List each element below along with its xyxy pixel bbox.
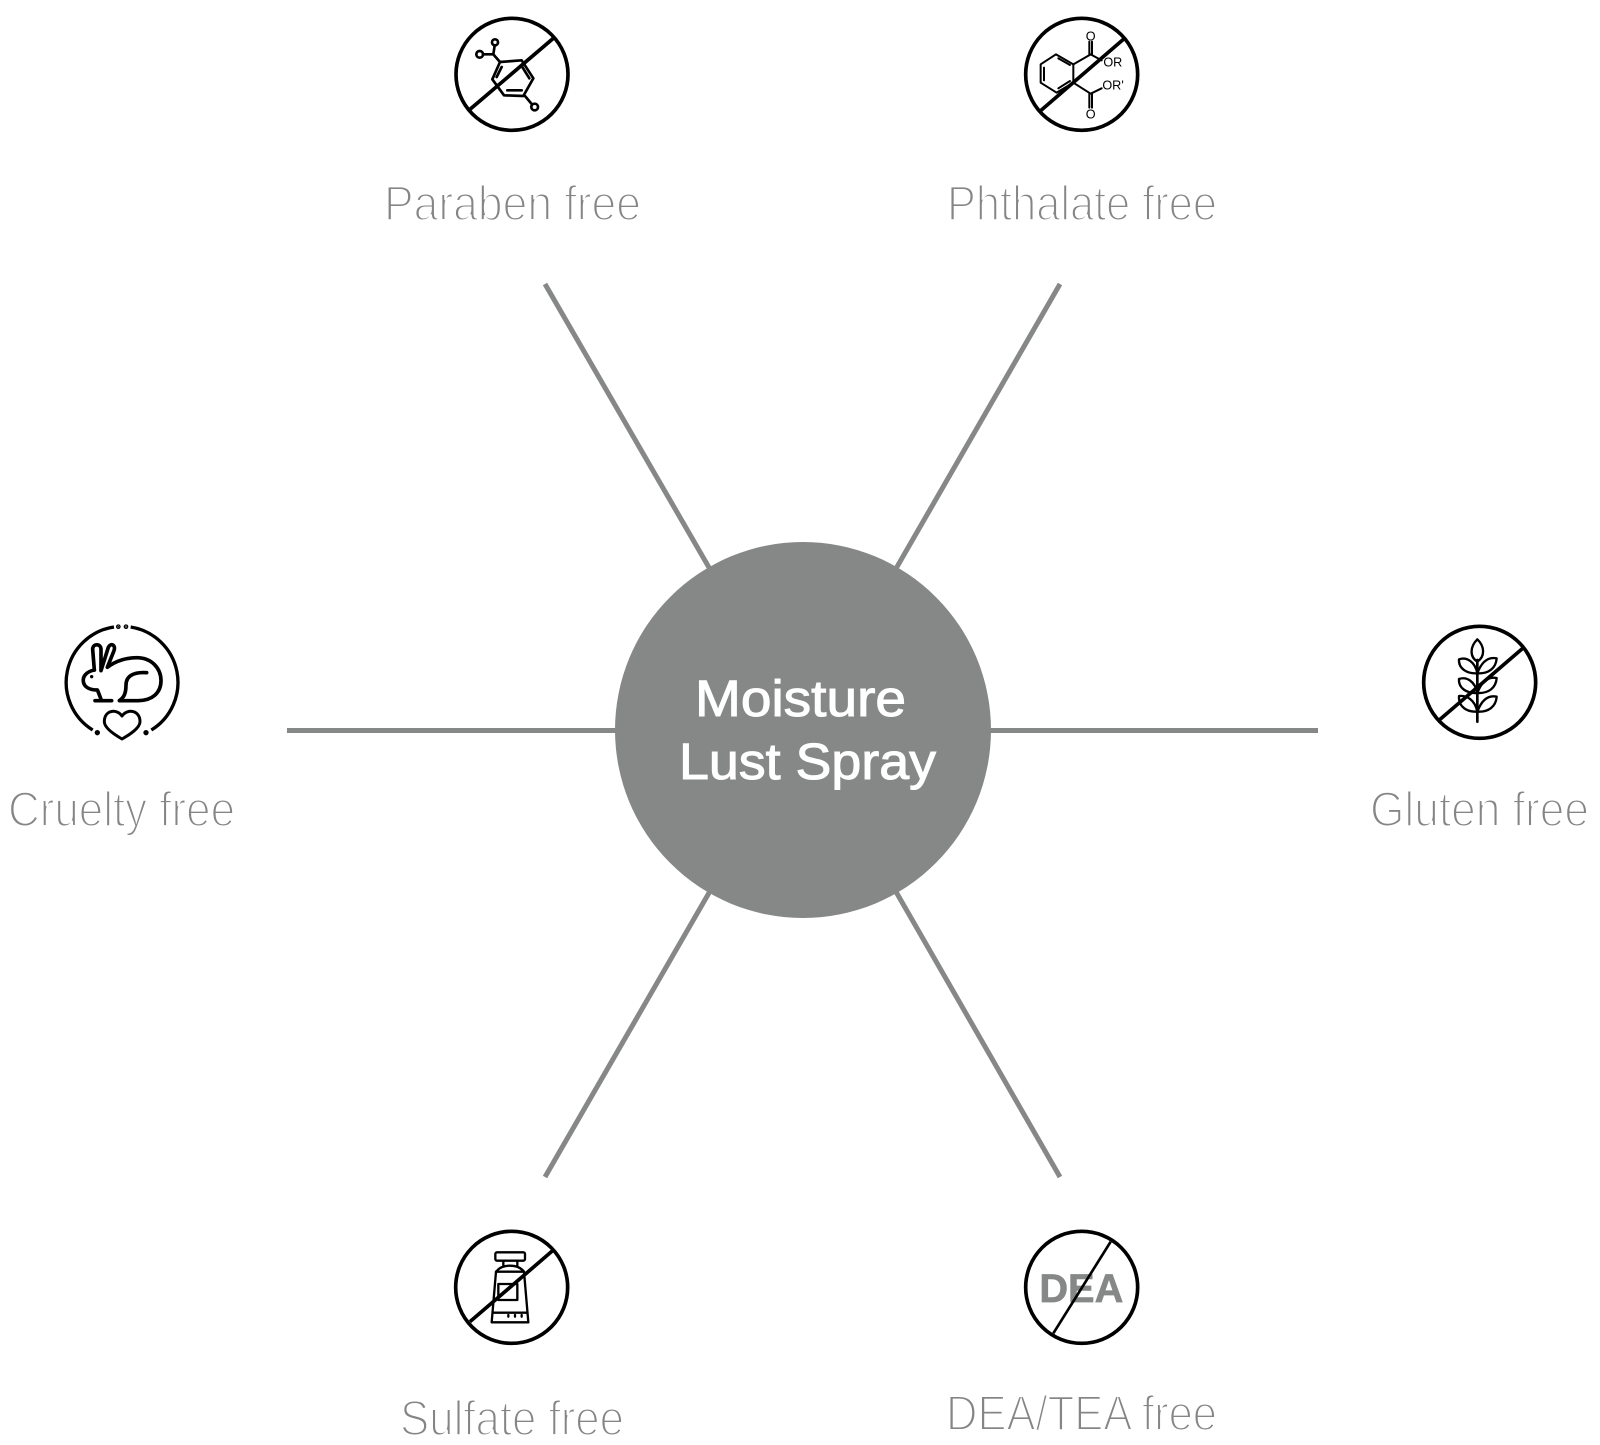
icon: DEA crossed out — [1026, 1231, 1138, 1343]
icon: tube crossed out — [456, 1231, 568, 1343]
hub title — [679, 670, 937, 790]
item: DEA/TEA free — [946, 1231, 1217, 1441]
label: DEA/TEA free: DEA/TEA free — [946, 1387, 1217, 1441]
hub title: Moisture — [695, 670, 906, 727]
item: gluten free — [1370, 626, 1589, 837]
label: phthalate free: Phthalate free — [947, 177, 1217, 231]
icon: phthalate molecule crossed out: OR' — [1102, 78, 1124, 92]
icon: phthalate molecule crossed out: OR — [1103, 56, 1122, 70]
item: cruelty free — [8, 626, 235, 837]
icon: phthalate molecule crossed out: O — [1086, 107, 1096, 121]
icon: phthalate molecule crossed out — [1026, 18, 1138, 130]
label: paraben free: Paraben free — [384, 177, 641, 231]
label: sulfate free: Sulfate free — [400, 1392, 624, 1445]
label: cruelty free: Cruelty free — [8, 783, 235, 837]
item: phthalate free — [947, 18, 1217, 231]
central hub — [615, 542, 991, 918]
item: sulfate free — [400, 1231, 624, 1445]
hub title: Lust Spray — [679, 733, 937, 790]
icon: wheat crossed out — [1424, 626, 1536, 738]
icon: paraben molecule crossed out — [456, 18, 568, 130]
icon: DEA crossed out: DEA — [1039, 1267, 1123, 1311]
icon: rabbit and heart — [66, 626, 178, 739]
icon: phthalate molecule crossed out: O — [1086, 29, 1096, 43]
spoke lines — [287, 284, 1318, 1177]
hub circle — [615, 542, 991, 918]
item: paraben free — [384, 18, 641, 231]
